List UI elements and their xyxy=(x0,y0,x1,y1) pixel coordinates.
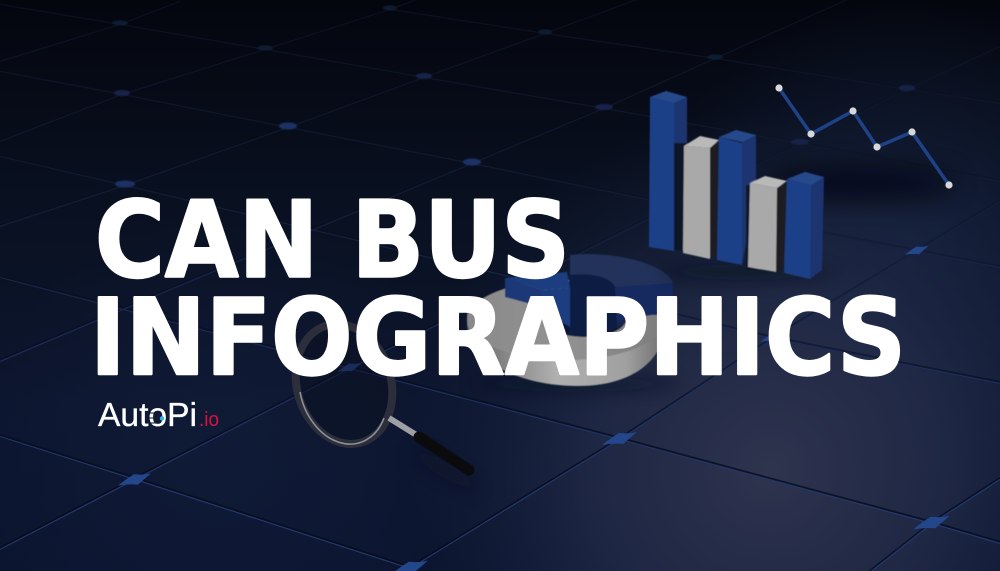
magnifying glass xyxy=(281,312,484,497)
3D line chart xyxy=(775,84,953,189)
pie chart shadow xyxy=(470,376,680,392)
blue pie segment xyxy=(505,272,570,327)
bar 1 blue xyxy=(649,91,690,251)
logo: AutoPi.io: .io xyxy=(199,409,219,431)
bar 4 white xyxy=(746,176,788,272)
title: CAN BUS xyxy=(95,180,570,302)
title: INFOGRAPHICS xyxy=(90,277,906,399)
bar 2 white xyxy=(683,136,720,259)
bar chart shadow xyxy=(660,264,830,280)
white ring of pie xyxy=(467,280,666,386)
bar 5 blue xyxy=(784,172,824,279)
dark blue pie segment xyxy=(569,254,673,336)
lens and rim xyxy=(281,312,407,456)
line chart shadow xyxy=(765,168,955,198)
3D bar chart xyxy=(649,91,824,279)
bar 3 blue xyxy=(717,130,756,265)
3D pie chart xyxy=(467,254,673,386)
handle xyxy=(389,418,469,470)
logo: AutoPi.io: AutoPi xyxy=(98,396,197,433)
title xyxy=(90,180,906,399)
